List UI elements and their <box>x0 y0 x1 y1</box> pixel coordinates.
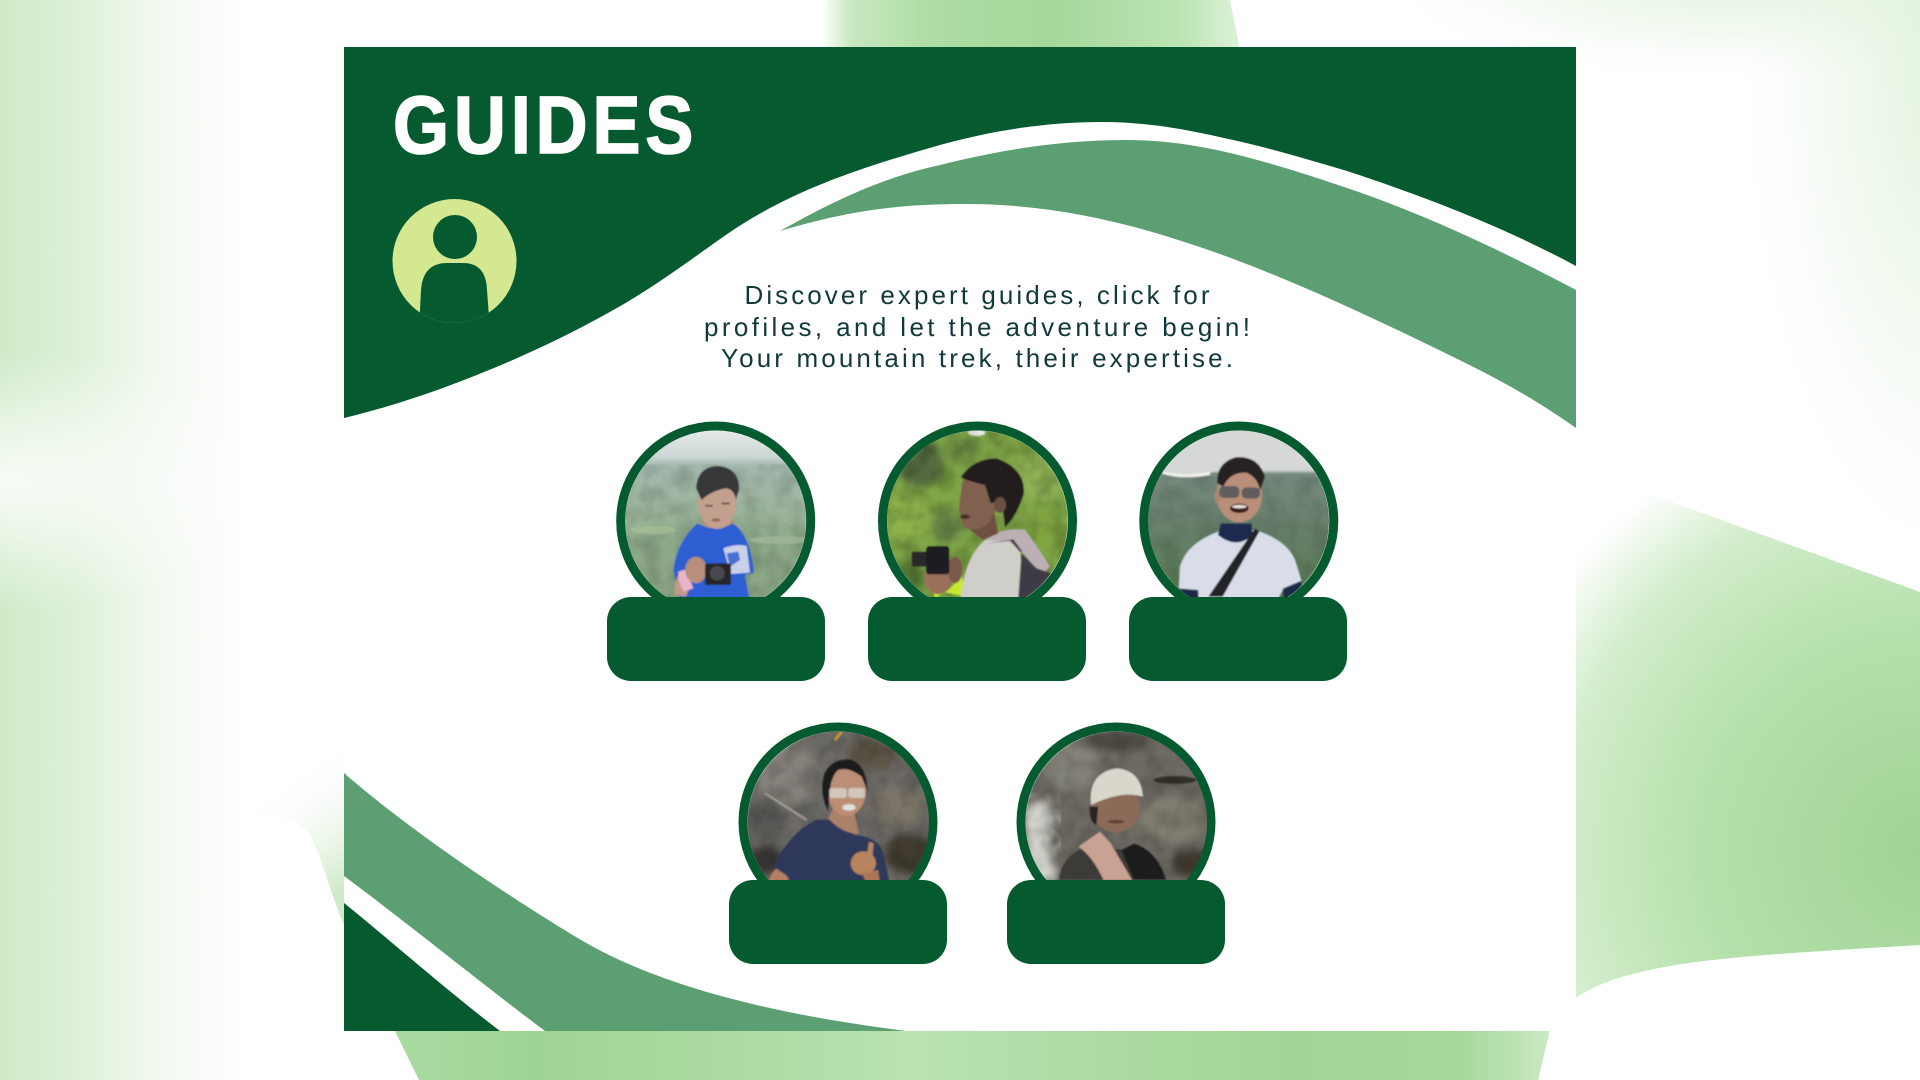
photo: smiling guide with sling bag <box>1148 430 1329 597</box>
name plate <box>1129 597 1347 681</box>
guide card 4 <box>729 727 947 964</box>
background: right green shape <box>1576 490 1920 998</box>
background: bottom green shape <box>392 1025 1551 1080</box>
background: top green shape <box>820 0 1240 50</box>
intro text: Your mountain trek, their expertise. <box>721 343 1233 373</box>
top medium green swoosh <box>780 140 1576 428</box>
name plate <box>729 880 947 964</box>
photo: guide in white cap by waterfall <box>1026 732 1208 880</box>
name plate <box>868 597 1086 681</box>
intro text: Discover expert guides, click for <box>744 280 1210 310</box>
guide card 2 <box>868 426 1086 681</box>
intro text: profiles, and let the adventure begin! <box>704 312 1250 342</box>
icon: person avatar <box>392 199 516 330</box>
title: GUIDES <box>393 80 698 171</box>
bottom medium green swoosh <box>344 773 906 1031</box>
photo ring <box>743 727 933 917</box>
guide card 3 <box>1129 426 1347 681</box>
photo ring <box>1021 727 1211 917</box>
bottom dark green corner <box>344 903 500 1031</box>
panel: white page <box>344 47 1576 1031</box>
photo ring <box>882 426 1072 616</box>
photo: guide with camera in blue shirt <box>626 430 806 597</box>
background: left gradient wash <box>0 0 344 1080</box>
guide card 5 <box>1007 727 1225 964</box>
background: top right wash <box>1380 0 1920 560</box>
name plate <box>607 597 825 681</box>
top dark green wave <box>344 47 1576 418</box>
name plate <box>1007 880 1225 964</box>
photo: smiling guide thumbs up by rock face <box>748 732 929 880</box>
photo ring <box>1144 426 1334 616</box>
intro text <box>704 280 1250 373</box>
photo ring <box>621 426 811 616</box>
photo: guide in profile on green hillside <box>887 430 1068 597</box>
guide card 1 <box>607 426 825 681</box>
